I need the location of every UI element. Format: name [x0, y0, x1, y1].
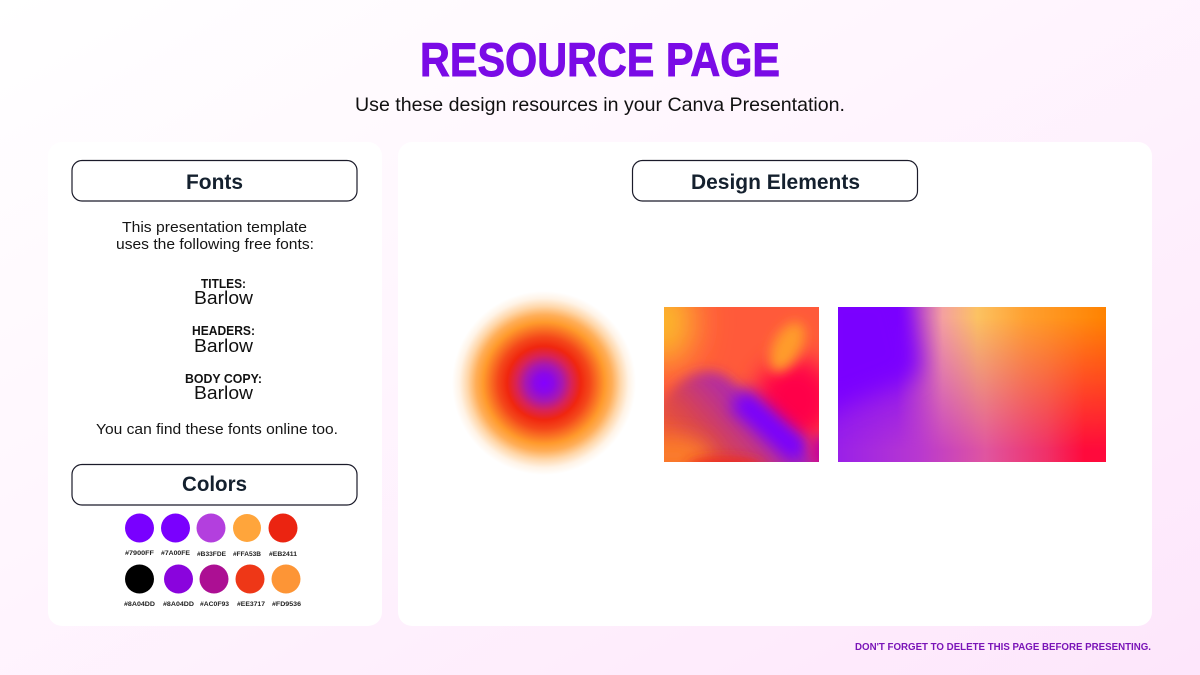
text block: headers font: Barlow [194, 336, 254, 356]
text block: titles font: TITLES: [201, 277, 246, 291]
heading: colors: Colors [182, 473, 247, 496]
title: RESOURCE PAGE [420, 33, 780, 86]
panel: design elements [398, 142, 1152, 626]
swatch: #AC0F93: #AC0F93 [200, 601, 229, 608]
swatch: black: #8A04DD [124, 601, 155, 608]
swatch: #7A00FE: #7A00FE [161, 550, 191, 557]
swatch: #B33FDE: #B33FDE [197, 551, 227, 558]
text block: intro: This presentation template [122, 220, 307, 236]
swatch: #FFA53B [233, 514, 261, 558]
heading: design elements [632, 160, 918, 201]
gradient orb [452, 291, 636, 475]
panel: fonts and colors [48, 142, 382, 626]
heading: fonts: Fonts [186, 171, 243, 194]
heading: design elements: Design Elements [691, 171, 860, 194]
swatch: #7900FF [125, 514, 154, 557]
subtitle: Use these design resources in your Canva Presentation. [355, 94, 845, 116]
text block: body copy font: BODY COPY: [185, 372, 262, 386]
swatch: #EB2411 [268, 514, 298, 558]
gradient square [664, 307, 819, 462]
footer note: DON'T FORGET TO DELETE THIS PAGE BEFORE PRESENTING. [855, 642, 1151, 653]
swatch: #7A00FE [161, 514, 191, 557]
swatch: #FFA53B: #FFA53B [233, 551, 261, 558]
swatch: #EE3717: #EE3717 [237, 601, 265, 608]
color swatches [124, 514, 301, 608]
text block: body copy font: Barlow [194, 383, 254, 403]
swatch: #EB2411: #EB2411 [269, 551, 297, 558]
text block: titles font: Barlow [194, 288, 254, 308]
text block: body copy font [185, 372, 262, 403]
swatch: #FD9536 [272, 564, 301, 608]
heading: fonts [72, 160, 357, 201]
text block: headers font: HEADERS: [192, 324, 255, 338]
text block: intro: uses the following free fonts: [116, 237, 314, 253]
swatch: black [124, 564, 155, 608]
swatch: #FD9536: #FD9536 [272, 601, 301, 608]
swatch: #8A04DD [163, 564, 194, 608]
swatch: #7900FF: #7900FF [125, 550, 154, 557]
text block: headers font [192, 324, 255, 356]
swatch: #AC0F93 [200, 564, 229, 608]
swatch: #EE3717 [236, 564, 265, 608]
text block: find fonts note: You can find these fonts online too. [96, 422, 338, 438]
heading: colors [72, 464, 357, 505]
gradient rectangle [838, 307, 1106, 462]
text block: intro [116, 220, 314, 253]
text block: titles font [194, 277, 254, 308]
swatch: #8A04DD: #8A04DD [163, 601, 194, 608]
swatch: #B33FDE [196, 514, 227, 558]
